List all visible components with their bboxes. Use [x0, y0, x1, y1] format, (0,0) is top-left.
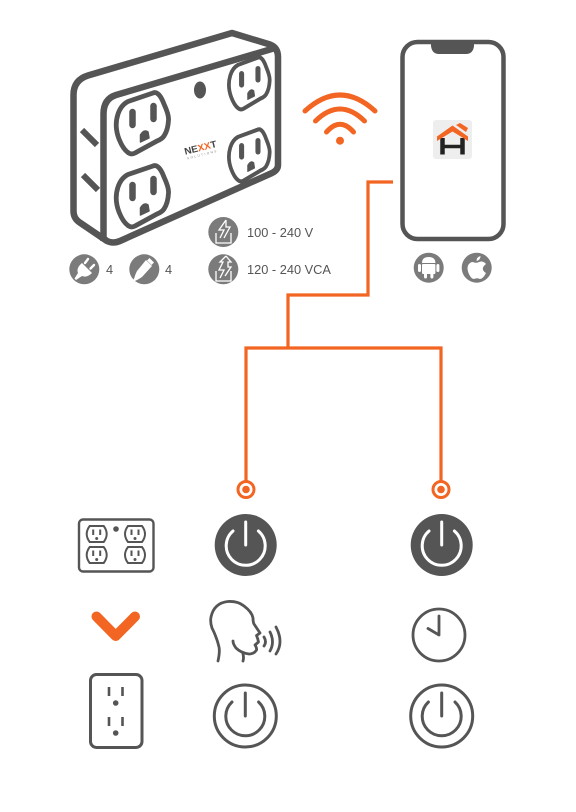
- device body: [74, 33, 278, 242]
- outlet: bottom right: [229, 129, 270, 181]
- outlet: top right: [229, 57, 270, 109]
- brand logo: NEXXT: [183, 139, 218, 158]
- icon: voltage input: [208, 217, 238, 247]
- side vents: [82, 130, 98, 190]
- device front panel edge: [104, 48, 275, 241]
- icon: plug: [69, 254, 99, 284]
- outlet: bottom left: [116, 166, 169, 227]
- smartphone: [402, 42, 504, 239]
- voltage output text: 120 - 240 VCA: [247, 262, 331, 277]
- power button outline left: [214, 685, 276, 747]
- icon: power strip mini: [79, 520, 154, 572]
- brand logo: SOLUTIONS: [187, 149, 217, 160]
- icon: voice control head: [211, 601, 280, 661]
- icon: android: [414, 253, 444, 283]
- icon: wall outlet: [90, 674, 142, 748]
- wifi icon: [305, 95, 375, 145]
- icon: clock: [413, 609, 465, 661]
- voltage input text: 100 - 240 V: [247, 225, 314, 240]
- plug count: 4: [106, 262, 113, 277]
- connector lines: [246, 182, 441, 482]
- app icon: [433, 120, 472, 159]
- connector node left: [238, 482, 254, 498]
- outlet: top left: [116, 93, 169, 154]
- power button solid left: [215, 514, 277, 576]
- connector node right: [433, 482, 449, 498]
- icon: chevron down: [96, 616, 135, 636]
- icon: voltage output: [208, 254, 238, 284]
- phone notch: [431, 42, 474, 54]
- power strip device: [74, 33, 278, 242]
- indicator light: [194, 82, 206, 98]
- power button solid right: [411, 514, 473, 576]
- icon: usb: [129, 254, 159, 284]
- power button outline right: [411, 685, 473, 747]
- usb count: 4: [165, 262, 172, 277]
- icon: apple: [462, 253, 492, 283]
